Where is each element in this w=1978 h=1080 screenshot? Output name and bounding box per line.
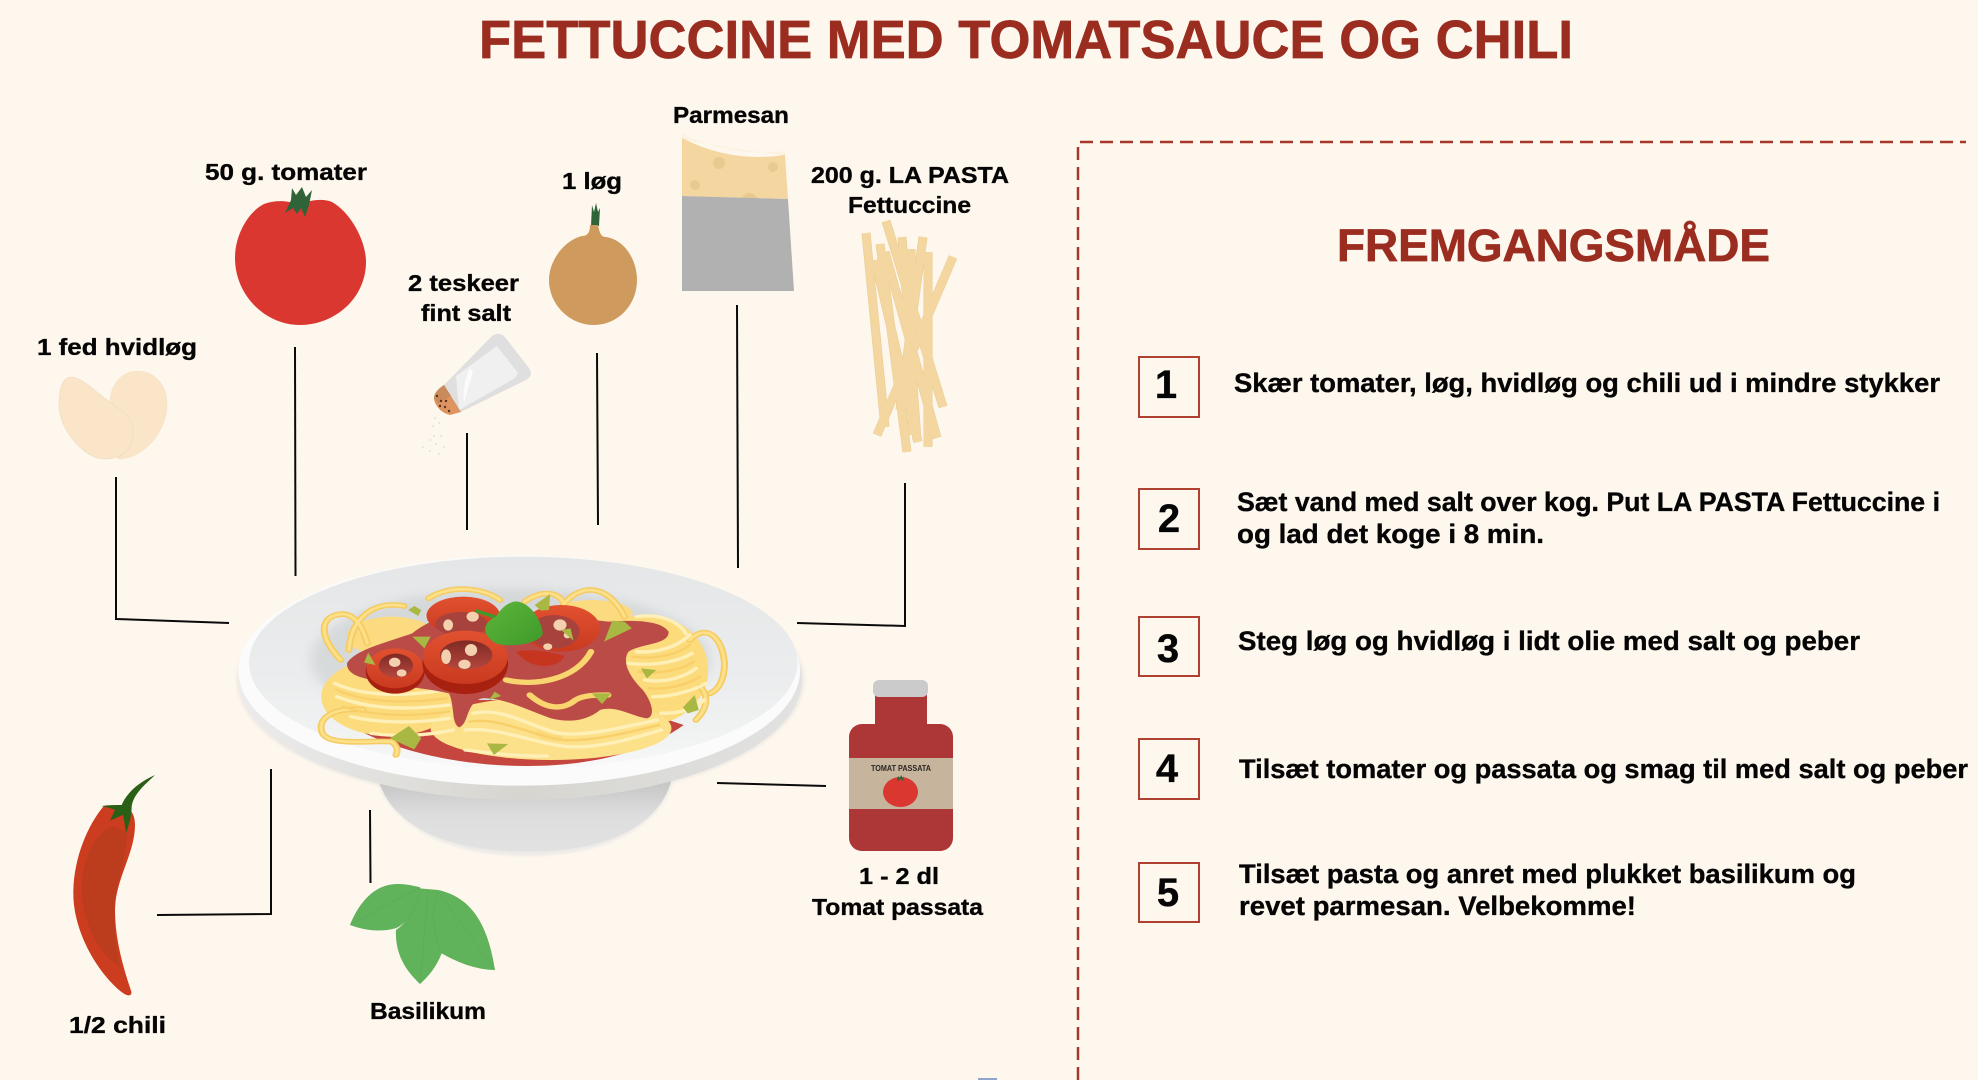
step 1 bbox=[1139, 357, 1940, 417]
ingredient: garlic bbox=[59, 371, 167, 459]
label: parmesan: Parmesan bbox=[673, 102, 789, 128]
label: chili: 1/2 chili bbox=[69, 1012, 166, 1038]
step 3 bbox=[1139, 617, 1860, 676]
ingredient: onion bbox=[549, 203, 637, 325]
label: tomatoes: 50 g. tomater bbox=[205, 159, 367, 185]
step 4: 4 bbox=[1156, 747, 1179, 791]
pasta strands on sauce bbox=[506, 652, 608, 707]
label: salt: fint salt bbox=[421, 300, 511, 326]
dashed panel border bbox=[1078, 142, 1966, 1080]
step 5: Tilsæt pasta og anret med plukket basilikum og bbox=[1239, 859, 1856, 889]
herb flakes bbox=[364, 594, 699, 755]
pasta bbox=[321, 589, 724, 760]
label: onion: 1 løg bbox=[562, 168, 622, 194]
label: fettuccine: Fettuccine bbox=[848, 192, 971, 218]
ingredient: basil bbox=[350, 884, 495, 984]
ingredient: parmesan bbox=[682, 133, 794, 291]
ingredient: tomato bbox=[235, 187, 366, 325]
label: salt: 2 teskeer bbox=[408, 270, 519, 296]
panel: method bbox=[1078, 142, 1968, 1080]
label: passata: 1 - 2 dl bbox=[859, 863, 939, 889]
step 5: 5 bbox=[1157, 871, 1179, 915]
sauce bbox=[347, 612, 669, 727]
connector lines to the plate bbox=[116, 305, 905, 915]
label: fettuccine: 200 g. LA PASTA bbox=[811, 162, 1009, 188]
title: FETTUCCINE MED TOMATSAUCE OG CHILI bbox=[479, 10, 1573, 70]
step 4: Tilsæt tomater og passata og smag til med salt og peber bbox=[1239, 754, 1968, 784]
label: garlic: 1 fed hvidløg bbox=[37, 334, 197, 360]
basil leaf bbox=[476, 602, 543, 645]
step 2 bbox=[1139, 487, 1940, 549]
label: passata bbox=[812, 863, 984, 920]
ingredient: chili bbox=[73, 775, 155, 995]
step 5 bbox=[1139, 859, 1856, 922]
ingredient: passata bottle: TOMAT PASSATA bbox=[871, 764, 931, 773]
label: passata: Tomat passata bbox=[812, 894, 984, 920]
step 2: Sæt vand med salt over kog. Put LA PASTA Fettuccine i bbox=[1237, 487, 1940, 517]
label: fettuccine bbox=[811, 162, 1009, 218]
label: salt bbox=[408, 270, 519, 326]
plate bbox=[237, 556, 804, 856]
ingredient: passata bottle bbox=[849, 680, 953, 851]
step 1: Skær tomater, løg, hvidløg og chili ud i mindre stykker bbox=[1234, 368, 1940, 398]
step 5: revet parmesan. Velbekomme! bbox=[1239, 891, 1636, 921]
ingredient: fettuccine bbox=[866, 221, 953, 452]
step 4 bbox=[1139, 739, 1968, 799]
step 3: Steg løg og hvidløg i lidt olie med salt og peber bbox=[1238, 626, 1860, 656]
step 1: 1 bbox=[1155, 363, 1177, 407]
tomato slices bbox=[366, 597, 600, 694]
step 3: 3 bbox=[1157, 627, 1179, 671]
step 2: 2 bbox=[1158, 497, 1180, 541]
step 2: og lad det koge i 8 min. bbox=[1237, 519, 1544, 549]
label: basil: Basilikum bbox=[370, 998, 486, 1024]
sauce pool bbox=[361, 700, 684, 766]
ingredient: salt shaker bbox=[422, 334, 531, 455]
plate of pasta bbox=[237, 556, 804, 856]
method heading: FREMGANGSMÅDE bbox=[1337, 220, 1770, 271]
